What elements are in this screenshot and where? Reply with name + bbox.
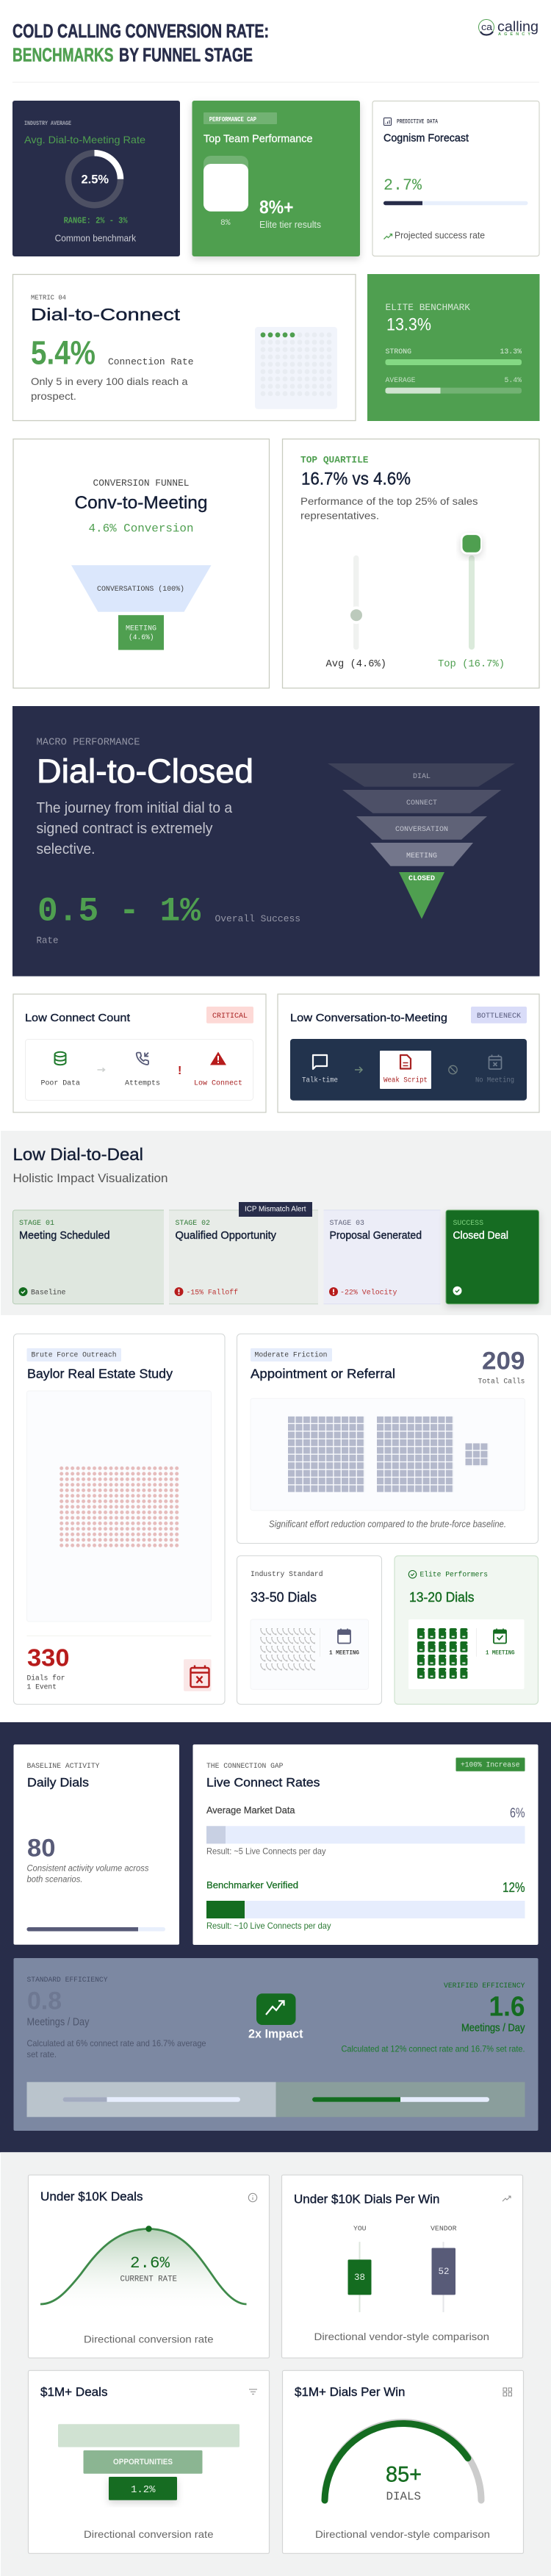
panel: low connect count bbox=[13, 994, 266, 1112]
panel: top quartile: 16.7% vs 4.6% bbox=[301, 469, 411, 489]
stage 02 card: -15% Falloff bbox=[187, 1289, 238, 1298]
panel: baylor real estate study: Baylor Real Estate Study bbox=[27, 1367, 173, 1381]
bar: average: 5.4% bbox=[504, 377, 522, 385]
badge: brute force outreach bbox=[26, 1348, 121, 1361]
panel: dial-to-closed: Dial-to-Closed bbox=[37, 752, 253, 790]
panel: efficiency comparison bbox=[13, 1958, 538, 2131]
success card: SUCCESS bbox=[453, 1220, 483, 1228]
bar: strong: 13.3% bbox=[500, 348, 522, 356]
stage 02 card: STAGE 02 bbox=[175, 1220, 210, 1228]
badge: bottleneck: BOTTLENECK bbox=[477, 1012, 521, 1021]
panel: dial-to-closed: MACRO PERFORMANCE bbox=[37, 737, 140, 748]
panel: industry standard: Industry Standard bbox=[251, 1570, 323, 1579]
panel: low conversation-to-meeting: Talk-time bbox=[302, 1076, 338, 1085]
stage 01 card bbox=[13, 1210, 164, 1304]
bar: average market data bbox=[206, 1805, 525, 1856]
bar: daily dials bbox=[26, 1927, 165, 1931]
panel: top quartile bbox=[282, 439, 539, 688]
funnel chart: CONNECT bbox=[406, 799, 437, 807]
panel: top team performance: Elite tier results bbox=[259, 219, 321, 230]
arrow bbox=[97, 1068, 104, 1071]
funnel: conversations bbox=[71, 565, 212, 612]
title bbox=[12, 20, 269, 65]
panel: elite benchmark bbox=[367, 274, 539, 421]
icon: warning triangle bbox=[210, 1052, 226, 1065]
panel: top team performance: 8%+ bbox=[259, 197, 294, 217]
panel: under $10k deals: Directional conversion rate bbox=[84, 2333, 214, 2345]
title: BY FUNNEL STAGE bbox=[119, 43, 253, 65]
funnel chart: DIAL bbox=[413, 773, 431, 781]
stage 01 card: Baseline bbox=[31, 1289, 66, 1298]
logo: calling agency: ca bbox=[481, 21, 493, 32]
funnel chart: CLOSED bbox=[408, 875, 435, 883]
stage 03 card: STAGE 03 bbox=[329, 1220, 364, 1228]
panel: conv-to-meeting bbox=[13, 439, 269, 688]
icon: grid bbox=[503, 2388, 511, 2396]
panel: low connect count: Low Connect Count bbox=[25, 1012, 131, 1024]
funnel chart bbox=[328, 763, 515, 919]
waffle chart: 209 calls bbox=[251, 1398, 525, 1511]
bar: benchmarker verified: 12% bbox=[503, 1880, 525, 1895]
section: low dial-to-deal bbox=[1, 1131, 551, 1315]
panel: top quartile: TOP QUARTILE bbox=[300, 455, 369, 466]
bar: average market data: Result: ~5 Live Connects per day bbox=[206, 1846, 326, 1856]
panel: elite performers bbox=[395, 1556, 538, 1705]
panel: live connect rates: THE CONNECTION GAP bbox=[206, 1763, 284, 1771]
title: COLD CALLING CONVERSION RATE: bbox=[12, 20, 269, 42]
funnel chart: CONVERSATION bbox=[395, 826, 448, 834]
dot matrix: 330 dials bbox=[26, 1391, 212, 1622]
panel: conv-to-meeting: CONVERSION FUNNEL bbox=[93, 478, 190, 489]
panel: top team performance bbox=[192, 101, 360, 256]
slider: average: Avg (4.6%) bbox=[326, 659, 386, 670]
panel: efficiency comparison: 0.8 bbox=[27, 1987, 62, 2015]
panel: efficiency comparison: Meetings / Day bbox=[461, 2022, 525, 2034]
panel: appointment or referral bbox=[237, 1334, 538, 1543]
icon: chat bubble bbox=[313, 1055, 327, 1069]
bar: strong: STRONG bbox=[385, 348, 411, 356]
badge: brute force outreach: Brute Force Outreach bbox=[31, 1351, 116, 1360]
badge: critical bbox=[206, 1007, 253, 1023]
icon: 2x impact: 2x Impact bbox=[248, 2027, 303, 2040]
panel: efficiency comparison: Meetings / Day bbox=[26, 2017, 90, 2029]
panel: appointment or referral: Total Calls bbox=[478, 1377, 525, 1386]
panel: daily dials: Consistent activity volume across bbox=[26, 1863, 148, 1874]
stage 02 card bbox=[169, 1210, 318, 1304]
funnel: conversations: CONVERSATIONS (100%) bbox=[97, 585, 184, 594]
panel: appointment or referral: Significant effort reduction compared to the brute-force baseline. bbox=[269, 1519, 506, 1529]
panel: baylor real estate study: 330 bbox=[27, 1644, 69, 1671]
panel: efficiency comparison: 1.6 bbox=[489, 1991, 525, 2022]
panel: cognism forecast: Cognism Forecast bbox=[383, 132, 469, 145]
panel: low conversation-to-meeting bbox=[278, 994, 539, 1112]
panel: daily dials: both scenarios. bbox=[26, 1874, 82, 1885]
badge: +100% increase bbox=[455, 1757, 525, 1771]
panel: industry standard: 33-50 Dials bbox=[251, 1589, 317, 1605]
badge: critical: CRITICAL bbox=[212, 1012, 248, 1021]
panel: dial-to-connect: Dial-to-Connect bbox=[31, 305, 181, 324]
panel: industry average: Avg. Dial-to-Meeting Rate bbox=[24, 134, 145, 145]
icon: trend bbox=[503, 2196, 511, 2201]
panel: low connect count: Attempts bbox=[125, 1080, 160, 1088]
section: low dial-to-deal: Holistic Impact Visualization bbox=[13, 1171, 168, 1185]
icon: phone incoming bbox=[137, 1053, 148, 1065]
logo: calling agency bbox=[479, 19, 539, 37]
logo: calling agency: calling bbox=[497, 19, 539, 35]
section: deal size benchmarks bbox=[1, 2152, 551, 2576]
alert mark: ! bbox=[178, 1065, 181, 1077]
panel: daily dials: 80 bbox=[27, 1835, 56, 1863]
panel: elite performers: 1 MEETING bbox=[486, 1650, 515, 1657]
panel: daily dials bbox=[13, 1744, 179, 1945]
logo: calling agency: AGENCY bbox=[498, 32, 530, 37]
panel: dial-to-closed: 0.5 - 1% bbox=[37, 893, 201, 931]
tooltip: icp mismatch alert bbox=[239, 1202, 312, 1217]
candlestick: vendor: 52 bbox=[438, 2266, 450, 2277]
panel: dial-to-connect: prospect. bbox=[31, 390, 76, 402]
panel: low conversation-to-meeting: Low Conversation-to-Meeting bbox=[290, 1012, 447, 1024]
donut chart: 2.5% bbox=[68, 153, 120, 205]
panel: $1m+ deals bbox=[28, 2370, 269, 2553]
badge: moderate friction: Moderate Friction bbox=[254, 1351, 328, 1360]
bell curve chart: 2.6% bbox=[130, 2254, 170, 2273]
bar: average market data: 6% bbox=[510, 1805, 525, 1820]
stage 02 card: Qualified Opportunity bbox=[175, 1230, 277, 1242]
badge: moderate friction bbox=[251, 1348, 332, 1361]
stage 03 card: -22% Velocity bbox=[340, 1289, 397, 1298]
panel: dial-to-connect bbox=[13, 275, 356, 420]
panel: elite performers: 13-20 Dials bbox=[409, 1589, 475, 1605]
panel: live connect rates bbox=[192, 1744, 538, 1945]
panel: dial-to-closed: Overall Success bbox=[215, 913, 300, 924]
panel: $1m+ dials per win: $1M+ Dials Per Win bbox=[295, 2386, 406, 2399]
panel: dial-to-connect: Only 5 in every 100 dials reach a bbox=[31, 375, 188, 387]
panel: low connect count: Low Connect bbox=[194, 1080, 242, 1088]
candlestick: you bbox=[348, 2224, 372, 2312]
icon: bar chart bbox=[383, 118, 391, 125]
bar: strong bbox=[385, 348, 522, 365]
phone grid: 20 dials bbox=[417, 1628, 469, 1679]
panel: low conversation-to-meeting: No Meeting bbox=[475, 1076, 514, 1085]
candlestick: you: 38 bbox=[354, 2272, 365, 2283]
funnel chart: MEETING bbox=[406, 852, 437, 860]
panel: efficiency comparison: Calculated at 12% connect rate and 16.7% set rate. bbox=[341, 2043, 525, 2054]
panel: elite performers: Elite Performers bbox=[420, 1571, 488, 1580]
panel: $1m+ dials per win bbox=[282, 2370, 523, 2553]
icon: trend up bbox=[383, 234, 392, 240]
badge: +100% increase: +100% Increase bbox=[461, 1761, 520, 1769]
bell curve chart bbox=[40, 2226, 247, 2313]
panel: cognism forecast: Projected success rate bbox=[395, 229, 485, 240]
slider: top bbox=[438, 533, 505, 670]
panel: cognism forecast: PREDICTIVE DATA bbox=[397, 118, 439, 126]
gauge: 85+ dials: 85+ bbox=[386, 2463, 422, 2486]
panel: appointment or referral: 209 bbox=[482, 1347, 525, 1375]
panel: daily dials: Daily Dials bbox=[27, 1776, 89, 1789]
panel: under $10k dials per win bbox=[282, 2175, 523, 2358]
stacked funnel bars: 1.2% bbox=[131, 2484, 156, 2496]
dot grid: 5 in 100 bbox=[255, 327, 337, 409]
badge: performance cap: PERFORMANCE CAP bbox=[209, 116, 256, 123]
icon: database bbox=[54, 1052, 66, 1065]
bar: 8% bbox=[204, 156, 248, 228]
panel: $1m+ dials per win: Directional vendor-style comparison bbox=[315, 2528, 490, 2540]
step: weak script bbox=[380, 1051, 431, 1089]
badge: bottleneck bbox=[471, 1007, 527, 1023]
panel: cognism forecast: 2.7% bbox=[383, 176, 422, 195]
progress bar bbox=[383, 201, 527, 205]
bar: average market data: Average Market Data bbox=[206, 1805, 295, 1816]
gauge: 85+ dials bbox=[325, 2422, 481, 2503]
panel: industry average: Common benchmark bbox=[55, 232, 137, 243]
panel: industry average: RANGE: 2% - 3% bbox=[64, 216, 128, 226]
panel: efficiency comparison: set rate. bbox=[26, 2049, 57, 2059]
icon: 2x impact bbox=[248, 1993, 303, 2040]
stage 01 card: STAGE 01 bbox=[19, 1220, 54, 1228]
panel: conv-to-meeting: Conv-to-Meeting bbox=[75, 493, 207, 513]
panel: under $10k deals bbox=[28, 2175, 269, 2358]
panel: baylor real estate study: Dials for bbox=[26, 1674, 65, 1683]
panel: low connect count: Poor Data bbox=[41, 1080, 80, 1088]
bar: 8%: 8% bbox=[220, 219, 231, 228]
slider: top: Top (16.7%) bbox=[438, 659, 505, 670]
icon: filter bbox=[249, 2389, 257, 2394]
candlestick: vendor bbox=[431, 2224, 457, 2312]
panel: dial-to-connect: 5.4% bbox=[31, 334, 96, 371]
panel: conv-to-meeting: 4.6% Conversion bbox=[88, 522, 194, 535]
slider: average bbox=[326, 555, 386, 670]
panel: daily dials: BASELINE ACTIVITY bbox=[26, 1763, 100, 1771]
panel: efficiency comparison: STANDARD EFFICIENCY bbox=[26, 1976, 107, 1985]
bar: benchmarker verified: Benchmarker Verified bbox=[206, 1879, 298, 1890]
panel: industry average: INDUSTRY AVERAGE bbox=[24, 120, 71, 127]
panel: dial-to-closed: The journey from initial dial to a bbox=[37, 800, 233, 816]
stacked funnel bars bbox=[58, 2424, 240, 2500]
success card bbox=[446, 1210, 539, 1304]
panel: top quartile: Performance of the top 25% of sales bbox=[300, 495, 478, 507]
stage 03 card bbox=[323, 1210, 441, 1304]
panel: efficiency comparison: Calculated at 6% connect rate and 16.7% average bbox=[26, 2038, 206, 2048]
bell curve chart: CURRENT RATE bbox=[120, 2275, 177, 2284]
bar: benchmarker verified: Result: ~10 Live Connects per day bbox=[206, 1921, 331, 1931]
panel: dial-to-closed: signed contract is extremely bbox=[37, 821, 213, 837]
funnel: meeting: MEETING bbox=[126, 625, 156, 633]
stage 03 card: Proposal Generated bbox=[329, 1230, 422, 1242]
panel: baylor real estate study: 1 Event bbox=[26, 1684, 57, 1692]
panel: elite benchmark: ELITE BENCHMARK bbox=[385, 302, 470, 313]
icon: calendar bbox=[338, 1628, 350, 1643]
stacked funnel bars: OPPORTUNITIES bbox=[113, 2458, 173, 2467]
panel: $1m+ deals: Directional conversion rate bbox=[84, 2528, 214, 2540]
panel: efficiency comparison: VERIFIED EFFICIENCY bbox=[444, 1982, 525, 1990]
panel: dial-to-closed: Rate bbox=[37, 935, 59, 946]
bar: average bbox=[385, 377, 522, 394]
panel: under $10k deals: Under $10K Deals bbox=[40, 2190, 143, 2203]
icon: verified badge bbox=[408, 1571, 417, 1578]
funnel: meeting bbox=[118, 615, 164, 650]
panel: live connect rates: Live Connect Rates bbox=[206, 1776, 320, 1789]
icon: calendar check bbox=[494, 1628, 506, 1643]
panel: under $10k dials per win: Under $10K Dials Per Win bbox=[294, 2192, 439, 2206]
panel: elite benchmark: 13.3% bbox=[386, 314, 431, 335]
gauge: 85+ dials: DIALS bbox=[386, 2490, 421, 2503]
funnel: meeting: (4.6%) bbox=[129, 633, 154, 642]
panel: industry standard bbox=[237, 1556, 382, 1705]
panel: industry standard: 1 MEETING bbox=[329, 1650, 359, 1657]
icon: info bbox=[248, 2193, 257, 2202]
success card: Closed Deal bbox=[453, 1230, 508, 1242]
tooltip: icp mismatch alert: ICP Mismatch Alert bbox=[245, 1205, 306, 1214]
panel: top team performance: Top Team Performance bbox=[204, 133, 313, 145]
title: BENCHMARKS bbox=[12, 43, 113, 65]
section: dark comparison bbox=[0, 1722, 551, 2152]
panel: baylor real estate study bbox=[13, 1334, 225, 1705]
panel: appointment or referral: Appointment or Referral bbox=[251, 1367, 395, 1381]
icon: calendar x bbox=[184, 1659, 212, 1691]
stage 01 card: Meeting Scheduled bbox=[19, 1230, 110, 1242]
donut chart: 2.5%: 2.5% bbox=[81, 173, 109, 187]
badge: performance cap bbox=[204, 112, 277, 124]
panel: cognism forecast bbox=[372, 101, 539, 256]
step: weak script: Weak Script bbox=[383, 1076, 428, 1085]
candlestick: you: YOU bbox=[353, 2224, 367, 2232]
bar: average: AVERAGE bbox=[385, 377, 416, 385]
comparison bars bbox=[26, 2082, 525, 2117]
panel: $1m+ deals: $1M+ Deals bbox=[40, 2386, 107, 2399]
panel: industry average bbox=[12, 101, 180, 256]
bar: benchmarker verified bbox=[206, 1879, 525, 1931]
panel: dial-to-connect: Connection Rate bbox=[108, 356, 194, 367]
panel: dial-to-closed: selective. bbox=[37, 841, 96, 857]
panel: dial-to-closed bbox=[12, 706, 539, 976]
icon: calendar x bbox=[489, 1055, 501, 1069]
arrow bbox=[355, 1067, 362, 1073]
section: low dial-to-deal: Low Dial-to-Deal bbox=[13, 1145, 143, 1164]
panel: top quartile: representatives. bbox=[300, 510, 379, 522]
candlestick: vendor: VENDOR bbox=[431, 2224, 457, 2232]
phone grid: 50 dials bbox=[260, 1628, 315, 1672]
panel: under $10k dials per win: Directional vendor-style comparison bbox=[314, 2331, 489, 2342]
icon: blocked bbox=[449, 1065, 457, 1074]
panel: dial-to-connect: METRIC 04 bbox=[31, 294, 66, 302]
